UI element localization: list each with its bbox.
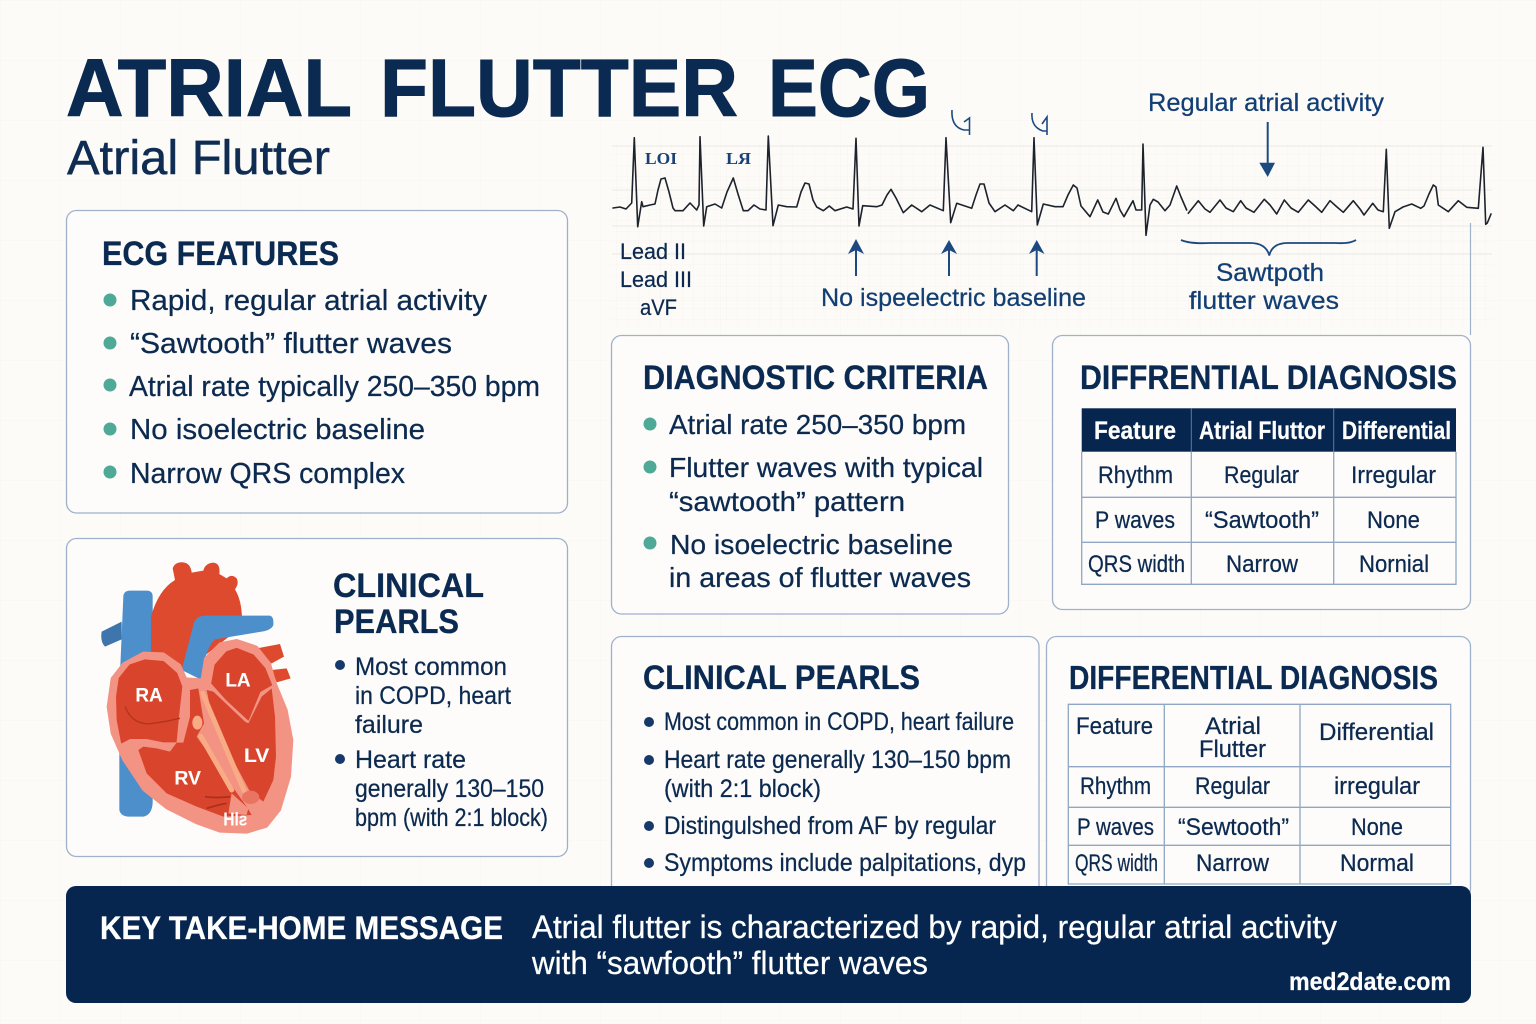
table: differential bottom: Feature [1076, 713, 1153, 740]
lead labels: Lead III [620, 267, 692, 292]
table: differential bottom: Flutter [1199, 736, 1266, 763]
bullet: most common [335, 653, 511, 739]
table: differential bottom: P waves [1077, 814, 1154, 841]
ECG strip chart [613, 89, 1491, 335]
chamber label: RA: RA [135, 686, 163, 707]
heading: ecg features: ECG FEATURES [102, 235, 339, 273]
panel: clinical pearls with heart [66, 538, 568, 856]
bullet: heart rate: bpm (with 2:1 block) [355, 804, 548, 832]
panel: ecg features [66, 210, 568, 513]
lead labels: aVF [640, 295, 677, 320]
arrow: up 3 [1029, 240, 1044, 276]
bullet: no baseline: in areas of flutter waves [669, 562, 971, 593]
table: differential top: Narrow [1226, 551, 1299, 578]
table: differential top: None [1367, 507, 1420, 534]
table: differential bottom: irregular [1334, 773, 1420, 800]
title: FLUTTER [380, 43, 738, 134]
bullet: heart rate [644, 746, 1011, 803]
table: differential top: QRS width [1088, 551, 1185, 578]
label: sawtooth flutter waves: Sawtpoth [1216, 259, 1324, 287]
panel: diagnostic criteria [612, 336, 1008, 614]
table: differential top [1082, 408, 1456, 584]
bullet: most common: Most common [355, 653, 507, 681]
bullet: atrial rate: Atrial rate typically 250–350 bpm [129, 371, 540, 403]
table: differential top: Feature [1094, 417, 1176, 445]
table: differential bottom: Rhythm [1080, 773, 1151, 800]
label: His: Hlƨ [223, 808, 247, 829]
brace: sawtooth span [1181, 240, 1356, 256]
arrow: up 2 [941, 240, 957, 276]
heading: diffrential diagnosis: DIFFRENTIAL DIAGNOSIS [1080, 359, 1457, 397]
bullet: rapid activity: Rapid, regular atrial activity [130, 285, 488, 317]
table: differential top: Irregular [1351, 462, 1436, 489]
bullet: heart rate: Heart rate generally 130–150 bpm [664, 746, 1011, 774]
table: differential bottom: Regular [1195, 773, 1270, 800]
table: differential bottom: Differential [1319, 719, 1434, 746]
trace annotation: LR: LЯ [726, 149, 751, 168]
icon: heart anatomy [101, 562, 292, 833]
table: differential bottom: “Sewtooth” [1178, 814, 1289, 841]
panel: differential diagnosis top [1052, 336, 1470, 610]
table: differential bottom: None [1351, 814, 1403, 841]
table: differential top: “Sawtooth” [1205, 507, 1319, 534]
subtitle: Atrial Flutter [67, 132, 330, 185]
table: differential top: Differential [1342, 417, 1451, 445]
banner message [531, 909, 1337, 981]
arrow: down to flutter waves [1259, 122, 1275, 177]
label: no isoelectric baseline: No ispeelectric baseline [821, 284, 1086, 312]
table: differential bottom: Atrial [1205, 713, 1261, 740]
banner message: Atrial flutter is characterized by rapid, regular atrial activity [532, 909, 1337, 945]
bullet: flutter waves: “sawtooth” pattern [669, 486, 905, 517]
panel: clinical pearls middle [612, 636, 1039, 898]
heading: clinical pearls: CLINICAL PEARLS [643, 659, 920, 697]
bullet: flutter waves: Flutter waves with typical [669, 452, 983, 483]
banner: key take-home message [66, 886, 1471, 1003]
table: differential bottom: QRS width [1075, 850, 1158, 877]
bullet: no baseline: No isoelectric baseline [130, 414, 425, 446]
label: regular atrial activity: Regular atrial activity [1148, 89, 1385, 117]
marker glyph 2 [1032, 113, 1047, 135]
chamber label: LA: LA [225, 671, 251, 692]
banner heading: KEY TAKE-HOME MESSAGE [100, 910, 503, 946]
table: differential bottom: Narrow [1196, 850, 1270, 877]
source credit: med2date.com [1289, 968, 1451, 996]
bullet: most common: failure [355, 711, 423, 739]
banner message: with “sawfooth” flutter waves [531, 945, 928, 981]
title: ATRIAL [66, 43, 352, 134]
heading: clinical pearls: CLINICAL [333, 567, 484, 605]
table: differential top: Regular [1224, 462, 1299, 489]
ECG trace [613, 136, 1491, 235]
table: differential top: Nornial [1359, 551, 1429, 578]
label: sawtooth flutter waves: flutter waves [1189, 287, 1339, 315]
chamber label: RV: RV [174, 768, 201, 789]
chamber label: LV: LV [244, 746, 269, 767]
bullet: narrow qrs: Narrow QRS complex [130, 458, 405, 490]
bullet: heart rate [335, 746, 548, 832]
heading: clinical pearls: PEARLS [334, 603, 459, 641]
trace annotation: LOI: LOI [645, 149, 677, 168]
connector line [1470, 223, 1472, 335]
label: sawtooth flutter waves [1189, 259, 1339, 315]
lead labels [620, 239, 692, 320]
bullet: heart rate: (with 2:1 block) [664, 775, 821, 803]
lead labels: Lead II [620, 239, 686, 264]
bullet: most common: Most common in COPD, heart failure [664, 708, 1014, 736]
bullet: heart rate: generally 130–150 [355, 775, 544, 803]
heading: clinical pearls [333, 567, 484, 641]
bullet: most common: in COPD, heart [355, 682, 511, 710]
heading: differential diagnosis: DIFFERENTIAL DIAGNOSIS [1069, 659, 1438, 696]
bullet: no baseline [644, 529, 971, 593]
arrow: up 1 [848, 239, 864, 276]
bullet: sawtooth: “Sawtooth” flutter waves [130, 328, 452, 360]
table: differential top: Atrial Fluttor [1199, 417, 1325, 445]
title: ECG [768, 43, 930, 134]
bullet: no baseline: No isoelectric baseline [670, 529, 953, 560]
bullet: distinguished from AF: Distingulshed from AF by regular [664, 812, 996, 840]
bullet: heart rate: Heart rate [355, 746, 466, 774]
marker glyph 1 [952, 110, 970, 135]
heading: diagnostic criteria: DIAGNOSTIC CRITERIA [643, 359, 988, 397]
bullet: flutter waves [644, 452, 983, 517]
table: differential bottom: Normal [1340, 850, 1414, 877]
bullet: atrial rate: Atrial rate 250–350 bpm [669, 409, 966, 440]
bullet: symptoms: Symptoms include palpitations, dyp [664, 849, 1026, 877]
table: differential top: P waves [1095, 507, 1175, 534]
table: differential top: Rhythm [1098, 462, 1173, 489]
table: differential bottom [1068, 704, 1451, 884]
panel: differential diagnosis bottom [1046, 636, 1470, 898]
title [66, 43, 930, 134]
